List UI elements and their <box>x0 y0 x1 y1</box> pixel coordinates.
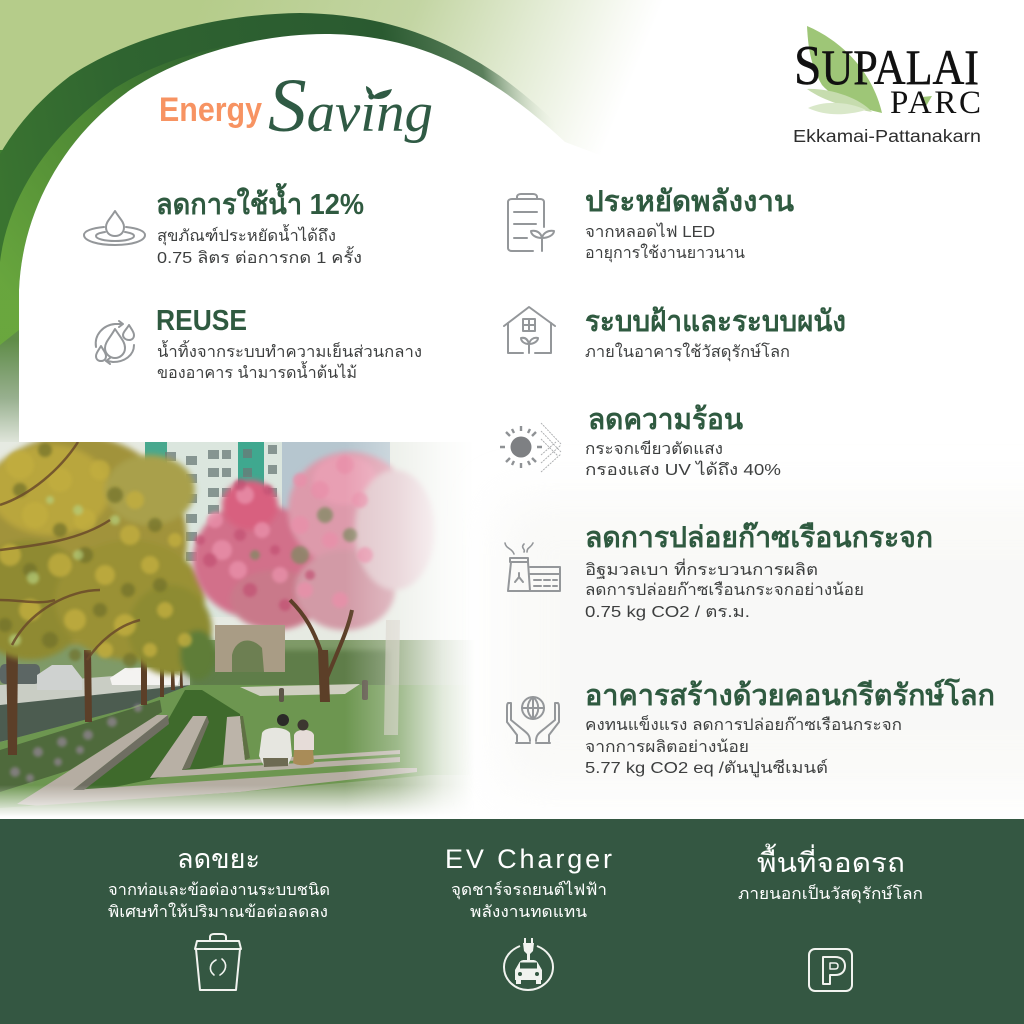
footer item: waste reduction: จากท่อและข้อต่องานระบบชนิด <box>108 881 330 899</box>
icon: sun and reflected rays <box>500 423 561 472</box>
logo: Supalai Parc: PARC <box>890 85 981 121</box>
footer item: EV charger: จุดชาร์จรถยนต์ไฟฟ้า <box>451 880 607 900</box>
title: Energy Saving: Energy <box>159 91 262 129</box>
parked cars <box>0 664 180 690</box>
footer item: waste reduction: ลดขยะ <box>177 844 260 874</box>
panel: heat reduction: กรองแสง UV ได้ถึง 40% <box>585 460 781 479</box>
ground: road, lawn and hedge <box>0 640 465 814</box>
panel: ceiling and wall system: ระบบฝ้าและระบบผนัง <box>585 306 846 338</box>
yellow foliage texture <box>0 443 192 667</box>
panel: water saving 12%: 0.75 ลิตร ต่อการกด 1 ครั้ง <box>157 246 362 267</box>
green watercolour backdrop with arched frame <box>0 0 720 442</box>
panel: ceiling and wall system: ภายในอาคารใช้วัสดุรักษ์โลก <box>585 342 790 362</box>
footer item: EV charger <box>445 844 612 990</box>
panel: water saving 12%: สุขภัณฑ์ประหยัดน้ำได้ถึง <box>157 224 336 246</box>
panel: greenhouse gas reduction <box>505 521 933 621</box>
icon: factory with smoke <box>505 543 560 591</box>
panel: LED energy saving: จากหลอดไฟ LED <box>585 222 715 241</box>
pink tree <box>193 452 435 680</box>
white arch panel <box>19 34 720 442</box>
yellow trees <box>0 435 216 680</box>
icon: recycling bin <box>195 934 241 990</box>
footer item: EV charger: พลังงานทดแทน <box>470 904 587 921</box>
panel: eco concrete building: 5.77 kg CO2 eq /ตันปูนซีเมนต์ <box>585 758 828 778</box>
icon: recycled water <box>96 321 134 364</box>
tree trunks <box>6 620 400 755</box>
panel: LED energy saving <box>508 186 794 263</box>
panel: reuse: ของอาคาร นำมารดน้ำต้นไม้ <box>157 361 357 382</box>
footer item: EV charger: EV Charger <box>445 844 612 874</box>
couple sitting on the step <box>259 714 314 767</box>
icon: hands holding globe <box>507 697 559 743</box>
panel: ceiling and wall system <box>504 306 846 362</box>
logo: Supalai Parc: Ekkamai-Pattanakarn <box>793 126 981 146</box>
panel: greenhouse gas reduction: ลดการปล่อยก๊าซเรือนกระจก <box>585 521 933 554</box>
icon: water drop ripple <box>84 211 145 245</box>
panel: water saving 12%: ลดการใช้น้ำ 12% <box>156 182 364 221</box>
icon: checklist with sprout <box>508 194 554 251</box>
concrete benches and steps <box>17 715 417 806</box>
panel: eco concrete building: คงทนแข็งแรง ลดการปล่อยก๊าซเรือนกระจก <box>585 714 902 734</box>
grass foreground <box>0 775 441 810</box>
panel: reuse: น้ำทิ้งจากระบบทำความเย็นส่วนกลาง <box>157 340 422 361</box>
footer item: parking: พื้นที่จอดรถ <box>757 843 905 878</box>
panel: LED energy saving: ประหยัดพลังงาน <box>585 186 794 218</box>
right side haze under text <box>500 500 1024 790</box>
footer item: waste reduction: พิเศษทำให้ปริมาณข้อต่อลดลง <box>108 902 328 921</box>
panel: greenhouse gas reduction: ลดการปล่อยก๊าซเรือนกระจกอย่างน้อย <box>585 580 864 599</box>
title: Energy Saving <box>159 64 433 148</box>
sky and far background <box>0 442 434 640</box>
panel: greenhouse gas reduction: อิฐมวลเบา ที่กระบวนการผลิต <box>585 558 818 579</box>
panel: heat reduction: กระจกเขียวตัดแสง <box>585 440 723 458</box>
footer item: parking: ภายนอกเป็นวัสดุรักษ์โลก <box>738 883 923 904</box>
small figures on the lawn <box>279 680 368 702</box>
panel: LED energy saving: อายุการใช้งานยาวนาน <box>585 243 745 263</box>
icon: house with sprout <box>504 307 555 353</box>
apartment tower <box>145 442 282 617</box>
plaza arch behind pink tree <box>215 625 285 672</box>
photo: garden with trees and residents <box>0 442 467 815</box>
icon: EV car with plug <box>504 938 553 990</box>
footer item: parking <box>738 843 923 991</box>
panel: heat reduction: ลดความร้อน <box>588 404 743 436</box>
logo: Supalai Parc <box>793 26 981 146</box>
tree branches <box>0 442 140 660</box>
panel: eco concrete building <box>507 677 995 778</box>
footer item: waste reduction <box>108 844 330 990</box>
panel: eco concrete building: จากการผลิตอย่างน้อย <box>585 738 749 756</box>
icon: parking sign <box>809 949 852 991</box>
logo: Supalai Parc: SUPALAI <box>794 35 979 97</box>
title: Energy Saving: Saving <box>268 64 433 148</box>
panel: reuse: REUSE <box>156 305 247 337</box>
panel: greenhouse gas reduction: 0.75 kg CO2 / ตร.ม. <box>585 604 750 621</box>
panel: water saving 12% <box>84 182 364 267</box>
panel: reuse <box>96 305 422 382</box>
footer band <box>0 819 1024 1024</box>
panel: eco concrete building: อาคารสร้างด้วยคอนกรีตรักษ์โลก <box>585 677 995 712</box>
panel: heat reduction <box>500 404 781 479</box>
